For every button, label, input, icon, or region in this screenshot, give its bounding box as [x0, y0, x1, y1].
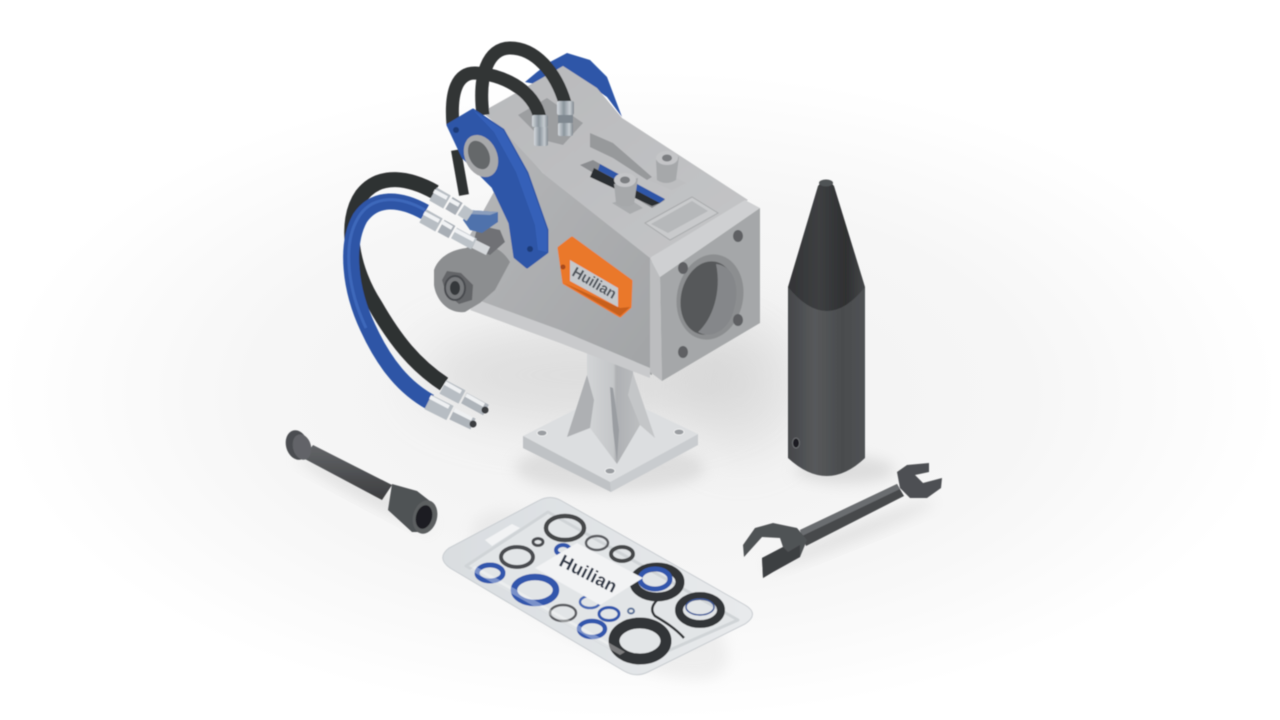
pedestal with base plate	[523, 340, 698, 492]
plastic glare	[470, 566, 625, 655]
rear blue arm	[525, 53, 622, 117]
upper black hoses	[452, 48, 565, 195]
base plate	[523, 434, 698, 492]
elbow and valve cluster	[472, 225, 505, 255]
top hose fittings	[532, 101, 574, 146]
post front	[612, 198, 643, 214]
lower blue and black hoses	[349, 180, 444, 402]
front blue arm	[448, 110, 547, 267]
bore	[669, 248, 751, 346]
open-end wrench	[743, 463, 942, 578]
blister backing	[443, 498, 752, 675]
top surface	[482, 66, 748, 258]
conical spike	[788, 180, 865, 476]
product artwork	[282, 48, 942, 675]
top face details	[580, 151, 718, 240]
seal kit blister pack: Huilian	[556, 551, 621, 597]
seal kit blister pack	[443, 498, 752, 675]
bolt holes	[678, 230, 743, 358]
raised rib side	[590, 133, 652, 180]
underside lip	[470, 300, 650, 378]
window slot	[580, 160, 665, 208]
orange nameplate	[559, 238, 631, 316]
hub	[434, 244, 510, 312]
recess	[645, 197, 718, 240]
lower hose end fittings	[428, 383, 488, 428]
brand card	[535, 543, 643, 605]
brand label: Huilian	[569, 265, 619, 303]
post rear	[648, 172, 686, 190]
O-rings	[477, 516, 721, 659]
hang slot	[485, 524, 520, 546]
soft floor shadows	[295, 315, 936, 711]
fitting recess	[518, 98, 583, 145]
column	[587, 340, 640, 464]
main body casting	[434, 66, 748, 378]
front flange	[650, 200, 760, 381]
socket rod tool	[282, 428, 441, 537]
side wall	[470, 130, 652, 375]
left hose fittings	[423, 191, 505, 255]
plate	[570, 260, 618, 307]
